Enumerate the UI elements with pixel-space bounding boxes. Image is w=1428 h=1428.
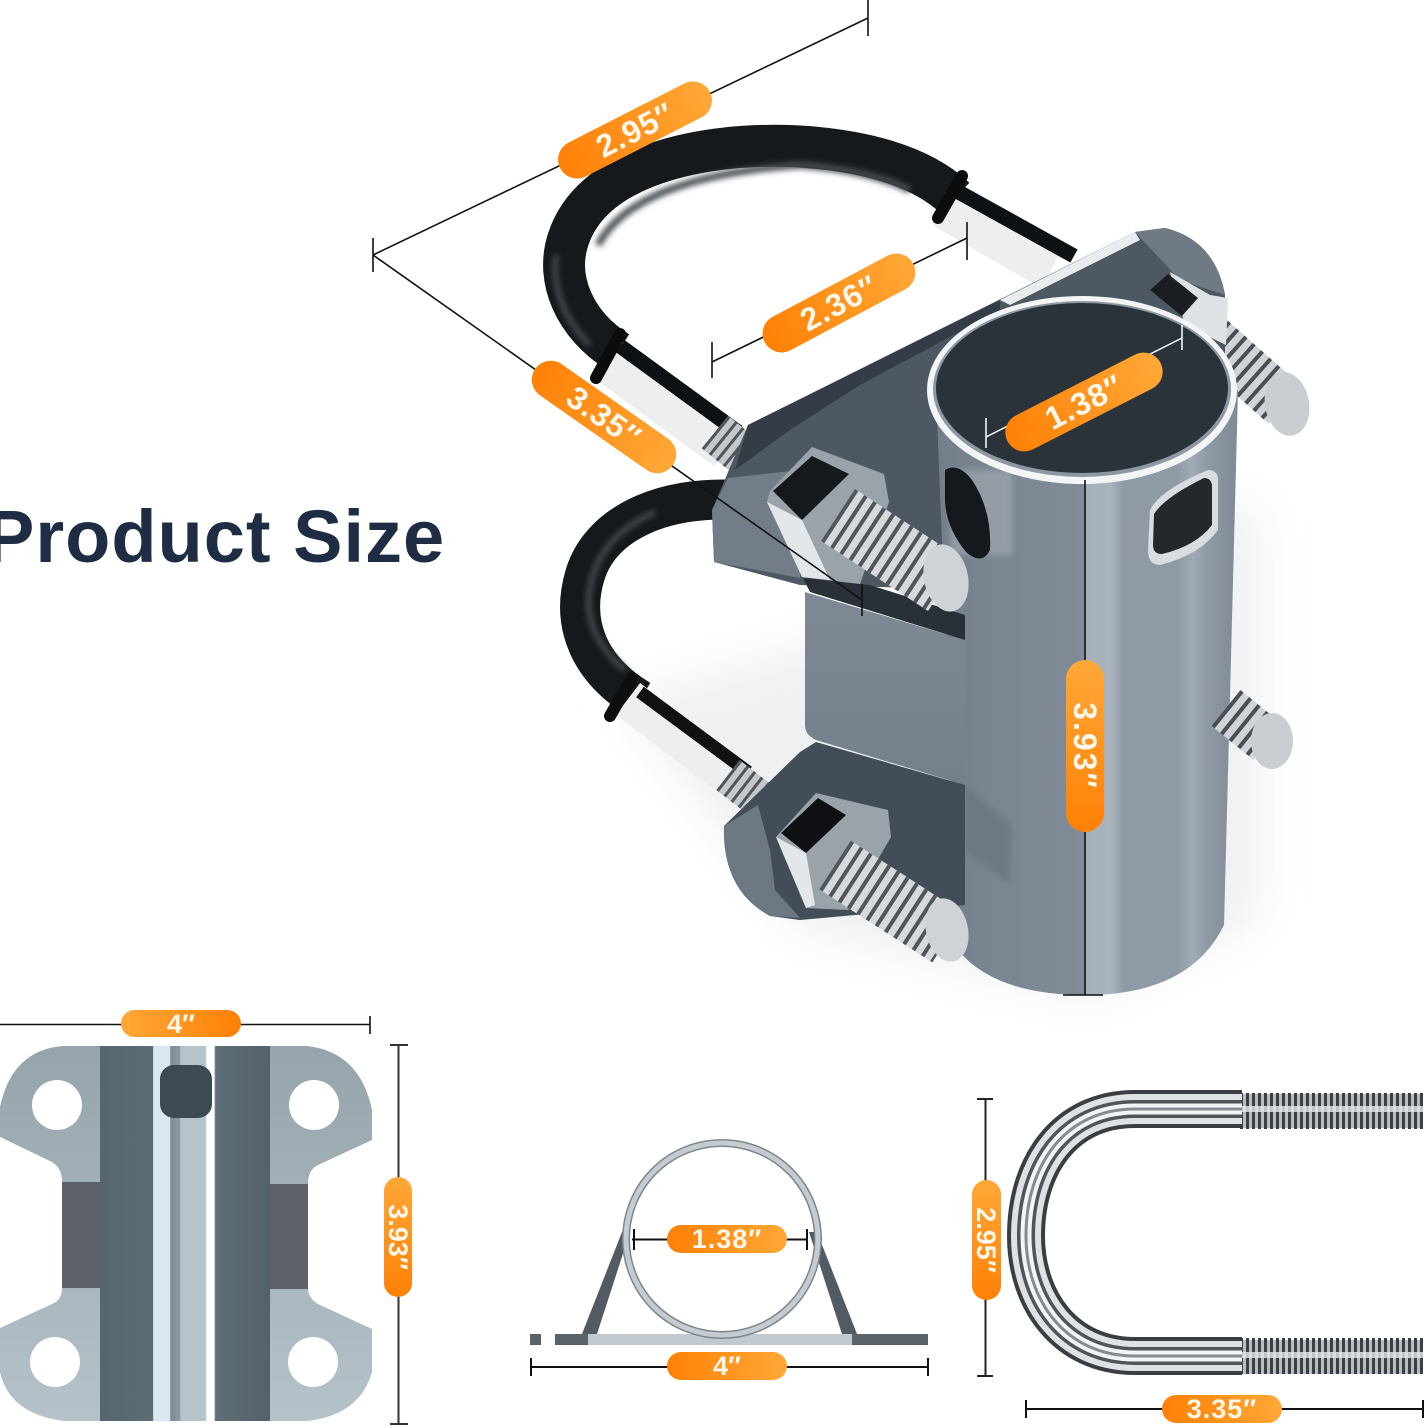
hex nut and bolt, upper front [767, 447, 975, 616]
tube side holes [945, 468, 1218, 885]
inner diameter dimension: 1.38 in: 1.38″ [692, 1224, 762, 1254]
flange plate [0, 1046, 100, 1421]
dimension pill: 2.36 in: 2.36″ [794, 268, 884, 338]
U-bolt length dimension: 3.35 in [1026, 1394, 1423, 1424]
dimension pill: 1.38 in [999, 346, 1169, 458]
dimension pill: 3.93 in: 3.93″ [1067, 702, 1103, 790]
rear bolt, upper [1195, 325, 1314, 439]
support legs [582, 1232, 630, 1334]
U-bolt length dimension: 3.35 in: 3.35″ [1187, 1394, 1257, 1424]
dimension pill: 3.35 in: 3.35″ [560, 379, 648, 455]
dimension pill: 3.93 in [1066, 660, 1104, 832]
upper flange [712, 228, 1225, 590]
dimension pill: 1.38 in: 1.38″ [1039, 367, 1129, 437]
height dimension: 3.93 in: 3.93″ [383, 1204, 413, 1270]
bolt threads [1240, 1094, 1423, 1374]
tube opening [927, 296, 1237, 484]
tube [100, 1046, 270, 1421]
bent chrome rod [1026, 1109, 1242, 1356]
width dimension: 4 in: 4″ [167, 1009, 195, 1039]
base plate [530, 1334, 928, 1345]
rear bolt, lower [1226, 708, 1293, 769]
U-bolt height dimension: 2.95 in [971, 1099, 1001, 1376]
front view of bracket [0, 1046, 372, 1421]
dimension pill: 2.95 in [552, 75, 718, 185]
side view of bracket [530, 1143, 928, 1345]
tube hole [160, 1065, 212, 1118]
height dimension: 3.93 in [383, 1045, 413, 1424]
U-bolt height dimension: 2.95 in: 2.95″ [971, 1207, 1001, 1273]
hex nut rear [1170, 272, 1228, 345]
main product: bracket with U-bolts [555, 146, 1314, 1000]
lower flange [724, 742, 965, 920]
width dimension: 4 in [0, 1009, 370, 1039]
web sections [62, 1182, 102, 1288]
tube body [936, 390, 1238, 995]
top U-bolt [555, 146, 1074, 462]
base width dimension: 4 in: 4″ [713, 1351, 741, 1381]
mounting holes [30, 1080, 339, 1387]
U-bolt view [1026, 1094, 1423, 1374]
dimension pill: 3.35 in [524, 353, 684, 481]
tube ring [626, 1143, 818, 1335]
dimension pill: 2.36 in [756, 247, 922, 359]
inner diameter dimension: 1.38 in [632, 1224, 807, 1254]
base width dimension: 4 in [531, 1351, 928, 1381]
lower U-bolt [580, 499, 768, 806]
dimension pill: 2.95 in: 2.95″ [590, 95, 680, 165]
dimension lines on main product [373, 0, 1182, 995]
web between flanges [805, 592, 965, 785]
hex nut and bolt, lower front [776, 793, 974, 966]
